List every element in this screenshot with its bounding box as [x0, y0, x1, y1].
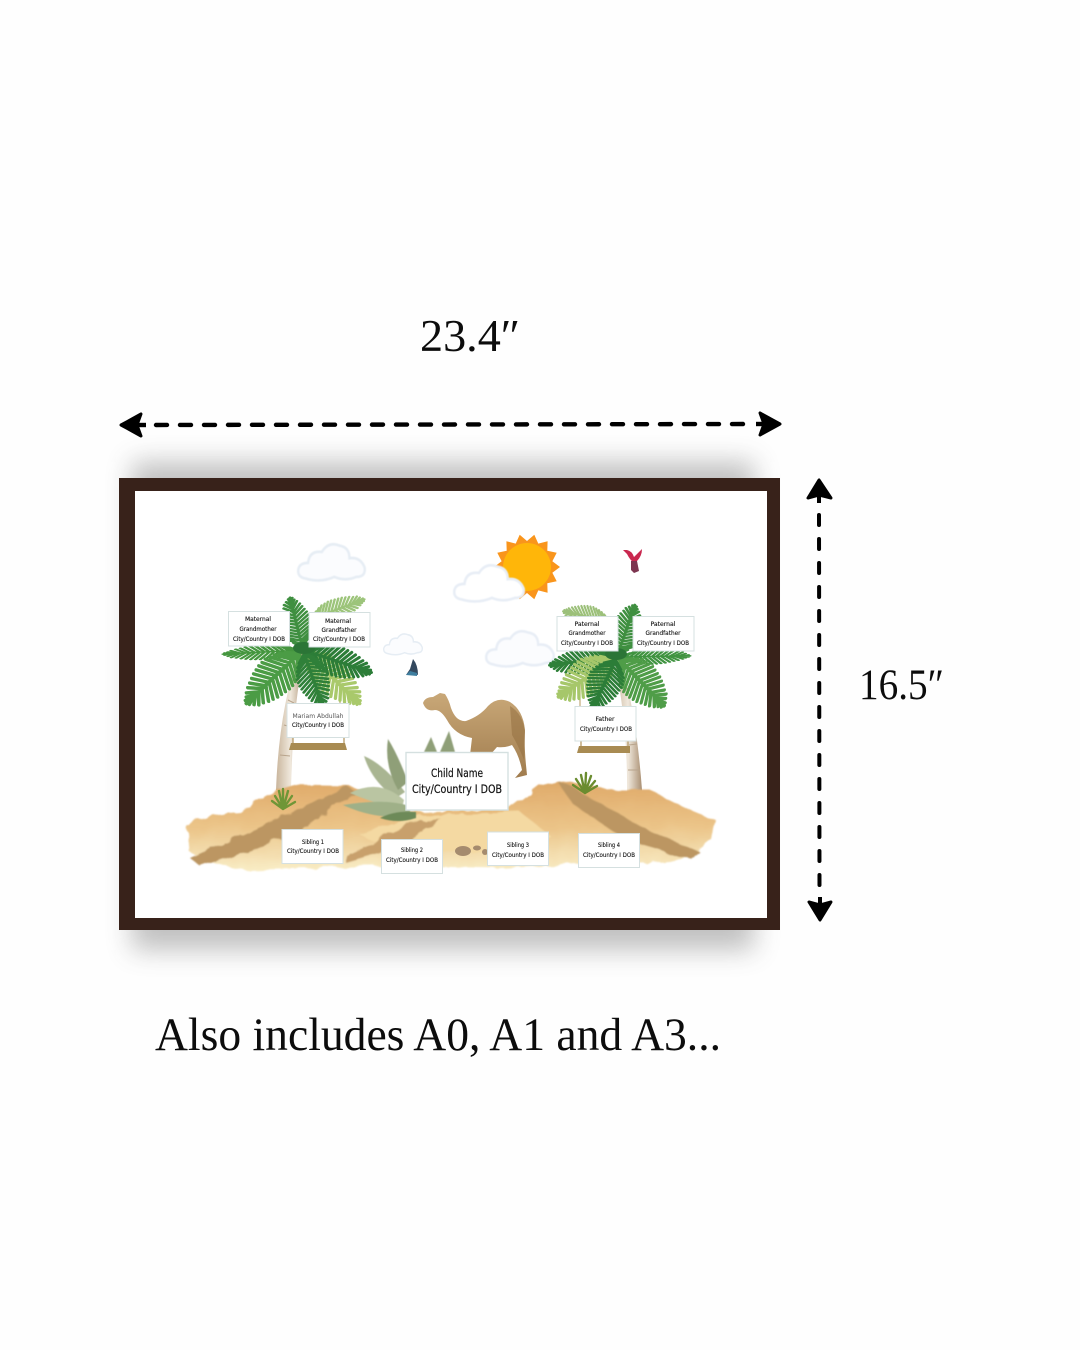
label: Sibling 1: Sibling 1	[302, 839, 324, 846]
label: Child: City/Country I DOB	[412, 782, 502, 796]
icon: butterfly	[406, 659, 418, 676]
cloud: in front of sun	[454, 565, 524, 601]
label: Father: City/Country I DOB	[580, 726, 632, 733]
poster illustration	[186, 535, 716, 874]
label: Sibling 4	[578, 834, 640, 868]
label: Maternal Grandfather: City/Country I DOB	[313, 636, 365, 643]
label: Mother: City/Country I DOB	[292, 722, 344, 729]
label: Sibling 2: City/Country I DOB	[386, 857, 438, 864]
desert tuft: left	[272, 789, 295, 809]
left palm tree	[223, 589, 376, 790]
label: Mother	[287, 704, 349, 738]
label: Sibling 4: Sibling 4	[598, 842, 620, 849]
label: Maternal Grandfather: Grandfather	[322, 627, 357, 634]
label: Paternal Grandmother: Grandmother	[568, 630, 606, 637]
label: Sibling 1: City/Country I DOB	[287, 848, 339, 855]
label: Father: Father	[596, 716, 615, 723]
cloud: upper left	[298, 544, 365, 580]
arrow: vertical double-headed dashed	[808, 480, 831, 920]
label: Child: Child Name	[431, 766, 483, 780]
label: Paternal Grandfather: Paternal	[650, 621, 676, 628]
label: Sibling 1	[282, 830, 343, 864]
width measurement: 23.4 inches: 23.4″	[420, 311, 520, 361]
cloud: right of centre	[486, 631, 554, 666]
stones	[455, 846, 488, 856]
label: Paternal Grandmother	[557, 616, 618, 651]
label: Maternal Grandfather: Maternal	[325, 618, 351, 625]
label: Sibling 3: Sibling 3	[507, 842, 529, 849]
label: Maternal Grandfather	[309, 612, 370, 647]
sun	[494, 535, 560, 599]
desert tuft: right	[573, 773, 597, 793]
swing: left	[289, 737, 347, 750]
label: Father	[575, 706, 636, 741]
swing: right	[577, 741, 630, 753]
label: Child	[406, 752, 508, 810]
label: Sibling 2	[382, 840, 442, 874]
label: Sibling 3	[488, 832, 548, 866]
label: Maternal Grandmother: Maternal	[245, 616, 271, 623]
desert agave plant	[343, 731, 455, 821]
label: Maternal Grandmother: Grandmother	[240, 626, 277, 633]
label: Maternal Grandmother: City/Country I DOB	[233, 636, 285, 643]
caption: other sizes: Also includes A0, A1 and A3...	[155, 1009, 721, 1061]
icon: red hummingbird	[623, 549, 642, 573]
label: Mother: Mariam Abdullah	[292, 713, 344, 720]
desert dunes	[186, 781, 716, 871]
label: Maternal Grandmother	[228, 612, 290, 646]
label: Sibling 4: City/Country I DOB	[583, 852, 635, 859]
height measurement: 16.5 inches: 16.5″	[859, 662, 944, 709]
right palm tree	[548, 600, 690, 803]
cloud: small centre	[384, 634, 422, 655]
label: Sibling 3: City/Country I DOB	[492, 852, 544, 859]
camel	[423, 693, 527, 778]
label: Sibling 2: Sibling 2	[401, 847, 423, 854]
label: Paternal Grandmother: Paternal	[574, 621, 600, 628]
label: Paternal Grandmother: City/Country I DOB	[561, 640, 613, 647]
label: Paternal Grandfather: Grandfather	[646, 630, 681, 637]
poster frame	[119, 478, 780, 930]
label: Paternal Grandfather	[633, 616, 694, 651]
frame shadow	[132, 462, 754, 950]
label: Paternal Grandfather: City/Country I DOB	[637, 640, 689, 647]
arrow: horizontal double-headed dashed	[121, 413, 780, 436]
